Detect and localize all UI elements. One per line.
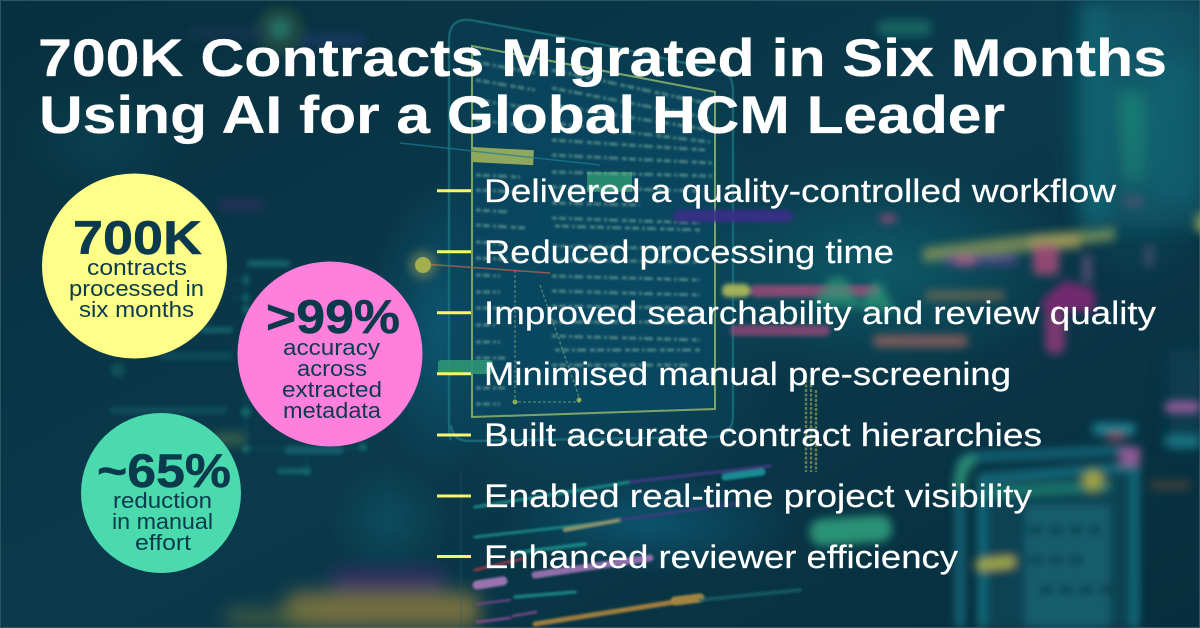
stat circle: >99% accuracy: accuracy	[283, 335, 380, 360]
list text: Improved searchability and review quality	[484, 295, 1156, 331]
stat circle: 700K contracts	[42, 174, 227, 358]
terminal outer frame	[449, 20, 733, 441]
list text: Minimised manual pre-screening	[484, 356, 1011, 392]
title: 700K Contracts Migrated in Six Months	[38, 29, 1167, 88]
stat circle: 700K contracts: contracts	[87, 255, 187, 280]
top left flare	[190, 6, 365, 54]
stat circle: 700K contracts: 700K	[73, 211, 202, 264]
list text: Enhanced reviewer efficiency	[484, 539, 958, 575]
stat circle: ~65% reduction	[81, 413, 241, 573]
terminal screen	[472, 46, 715, 417]
stat circle: ~65% reduction: ~65%	[97, 444, 231, 497]
top right panel	[1080, 2, 1200, 450]
blurred monitor	[809, 401, 1200, 628]
list text: Built accurate contract hierarchies	[484, 417, 1042, 453]
glowing bars	[673, 210, 880, 336]
benefits list	[437, 173, 1156, 575]
list text: Delivered a quality-controlled workflow	[484, 173, 1117, 209]
stat circle: ~65% reduction: reduction	[113, 488, 212, 513]
stat circle: ~65% reduction: in manual	[112, 509, 213, 534]
stat circle: >99% accuracy: >99%	[266, 290, 400, 343]
title: Using AI for a Global HCM Leader	[39, 86, 1005, 145]
stat circle: >99% accuracy	[238, 262, 422, 446]
list text: Enabled real-time project visibility	[484, 478, 1032, 514]
stat circle: >99% accuracy: across	[297, 356, 367, 381]
stat circle: >99% accuracy: extracted	[282, 377, 382, 402]
list dashes	[437, 191, 471, 556]
title	[38, 29, 1167, 145]
list text: Reduced processing time	[484, 234, 894, 270]
list text	[484, 173, 1156, 575]
stat circle: 700K contracts: six months	[79, 297, 194, 322]
lower code lines	[475, 466, 800, 624]
stat circle: >99% accuracy: metadata	[283, 398, 382, 423]
left circuits	[110, 260, 367, 475]
stat circle: ~65% reduction: effort	[135, 530, 191, 555]
stat circle: 700K contracts: processed in	[69, 276, 204, 301]
bottom left glow	[225, 570, 480, 628]
